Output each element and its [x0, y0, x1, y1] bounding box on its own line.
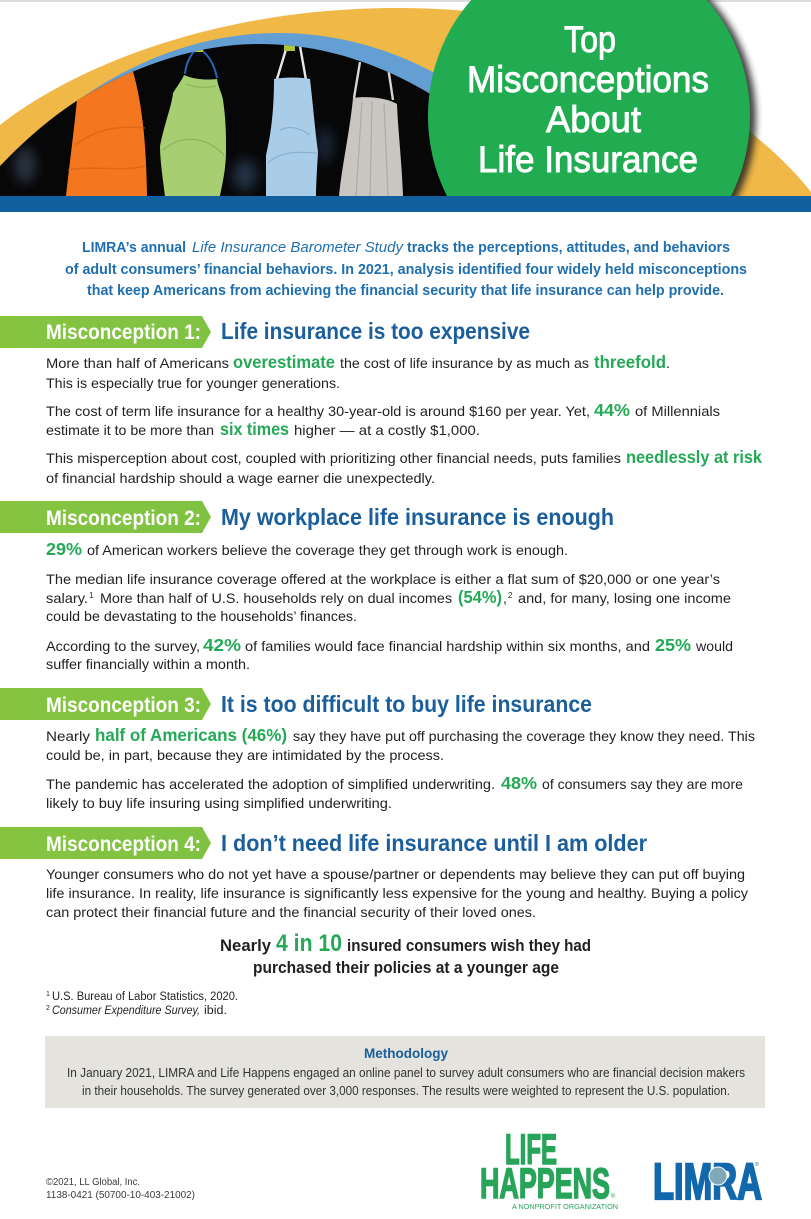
body 1: 44%	[594, 400, 630, 420]
methodology heading: Methodology	[364, 1045, 448, 1061]
body 1: estimate it to be more than	[46, 422, 214, 438]
green mask	[160, 48, 226, 196]
body 3: could be, in part, because they are intimidated by the process.	[46, 747, 444, 763]
body 4: can protect their financial future and the financial security of their loved ones.	[46, 904, 536, 920]
callout: Nearly	[220, 936, 272, 955]
body 1: of financial hardship should a wage earner die unexpectedly.	[46, 470, 435, 486]
intro text: Life Insurance Barometer Study	[192, 240, 404, 256]
body 2: According to the survey,	[46, 638, 200, 654]
body 2: of families would face financial hardship within six months, and	[245, 638, 650, 654]
body 1: The cost of term life insurance for a healthy 30-year-old is around $160 per year. Yet,	[46, 403, 590, 419]
body 2: of American workers believe the coverage they get through work is enough.	[87, 542, 568, 558]
heading 4: I don’t need life insurance until I am older	[221, 830, 647, 856]
panel: methodology	[45, 1036, 765, 1108]
title: Top	[564, 19, 616, 60]
banner 2: Misconception 2:	[46, 507, 201, 530]
body 2: suffer financially within a month.	[46, 656, 250, 672]
body 3: of consumers say they are more	[542, 776, 743, 792]
body 4	[46, 866, 748, 920]
body 2: salary.	[46, 590, 88, 606]
banner 3: Misconception 3:	[46, 694, 201, 717]
light blue mask	[266, 45, 318, 196]
body 3: 48%	[501, 773, 537, 793]
title	[467, 19, 709, 180]
body 3: half of Americans (46%)	[95, 725, 287, 745]
body 2	[46, 539, 733, 672]
body 2: would	[695, 638, 733, 654]
body 1: the cost of life insurance by as much as	[340, 355, 589, 371]
orange mask	[66, 68, 147, 196]
methodology text: in their households. The survey generated over 3,000 responses. The results were weighted to represent the U.S. population.	[82, 1084, 730, 1098]
logo: LIMRA	[653, 1153, 762, 1210]
body 1: overestimate	[233, 352, 335, 372]
heading 2: My workplace life insurance is enough	[221, 504, 614, 530]
body 2: 1	[89, 591, 94, 600]
callout	[220, 930, 591, 977]
blue band	[0, 196, 811, 212]
banner 1: Misconception 1:	[46, 321, 201, 344]
section: misconception 3	[0, 688, 755, 811]
body 1: This misperception about cost, coupled with prioritizing other financial needs, puts families	[46, 450, 621, 466]
footnotes: 2	[46, 1005, 50, 1012]
heading 3: It is too difficult to buy life insurance	[221, 691, 592, 717]
copyright: 1138-0421 (50700-10-403-21002)	[46, 1190, 195, 1201]
footnotes: Consumer Expenditure Survey,	[52, 1005, 200, 1017]
body 3: say they have put off purchasing the coverage they know they need. This	[293, 728, 755, 744]
body 2: 42%	[203, 635, 241, 655]
body 2: ,	[503, 590, 507, 606]
body 1: .	[666, 355, 670, 371]
body 2: More than half of U.S. households rely on dual incomes	[100, 590, 452, 606]
callout: 4 in 10	[276, 930, 342, 957]
title: About	[546, 99, 642, 140]
banner 2	[0, 501, 211, 533]
body 3: Nearly	[46, 728, 90, 744]
header illustration	[0, 0, 811, 212]
body 1: higher — at a costly $1,000.	[294, 422, 480, 438]
footnotes: U.S. Bureau of Labor Statistics, 2020.	[52, 991, 238, 1003]
logo: Life Happens	[480, 1126, 618, 1211]
intro text	[65, 240, 747, 299]
body 4: Younger consumers who do not yet have a spouse/partner or dependents may believe they can put off buying	[46, 866, 745, 882]
banner 4: Misconception 4:	[46, 833, 201, 856]
body 2: The median life insurance coverage offered at the workplace is either a flat sum of $20,000 or one year’s	[46, 571, 720, 587]
body 1: six times	[220, 419, 289, 439]
section: misconception 4	[0, 827, 748, 920]
section: misconception 1	[0, 316, 762, 486]
logo: Life Happens: ®	[611, 1193, 616, 1200]
body 2: and, for many, losing one income	[518, 590, 731, 606]
callout: insured consumers wish they had	[347, 936, 591, 955]
intro text: tracks the perceptions, attitudes, and behaviors	[407, 240, 730, 256]
section: misconception 2	[0, 501, 733, 672]
green circle shadow	[706, 0, 762, 196]
footnotes: 1	[46, 991, 50, 998]
grey mask	[339, 62, 403, 196]
body 2: 2	[508, 591, 513, 600]
callout: purchased their policies at a younger age	[253, 958, 559, 977]
intro text: that keep Americans from achieving the financial security that life insurance can help provide.	[87, 283, 724, 299]
body 3	[46, 725, 755, 811]
logo: LIMRA: LIMRA	[653, 1153, 762, 1210]
logo: LIMRA: ®	[755, 1161, 759, 1168]
body 1: This is especially true for younger generations.	[46, 375, 340, 391]
body 2: 25%	[655, 635, 691, 655]
body 2: (54%)	[458, 587, 502, 607]
body 2: 29%	[46, 539, 82, 559]
green circle	[428, 0, 750, 196]
footnotes: ibid.	[204, 1005, 227, 1017]
banner 1	[0, 316, 211, 348]
yellow arc	[0, 8, 811, 196]
logo: Life Happens: LIFE	[505, 1126, 557, 1174]
body 1: of Millennials	[635, 403, 720, 419]
heading 1: Life insurance is too expensive	[221, 318, 530, 344]
banner 4	[0, 827, 211, 859]
title: Life Insurance	[478, 139, 698, 180]
copyright	[46, 1177, 195, 1201]
body 1: More than half of Americans	[46, 355, 229, 371]
body 1	[46, 352, 762, 486]
methodology text: In January 2021, LIMRA and Life Happens engaged an online panel to survey adult consumers who are financial decision makers	[67, 1066, 745, 1080]
logo: Life Happens: A NONPROFIT ORGANIZATION	[512, 1202, 618, 1211]
logo: Life Happens: HAPPENS	[480, 1160, 610, 1208]
body 3: likely to buy life insuring using simplified underwriting.	[46, 795, 392, 811]
footnotes	[46, 991, 238, 1017]
methodology text	[67, 1066, 745, 1098]
copyright: ©2021, LL Global, Inc.	[46, 1177, 140, 1188]
body 1: needlessly at risk	[626, 447, 762, 467]
blue arc	[70, 33, 440, 120]
title: Misconceptions	[467, 59, 709, 100]
intro text: LIMRA’s annual	[82, 240, 186, 256]
mask photo	[0, 44, 447, 196]
body 1: threefold	[594, 352, 666, 372]
intro text: of adult consumers’ financial behaviors. In 2021, analysis identified four widely held misconceptions	[65, 262, 747, 278]
body 2: could be devastating to the households’ finances.	[46, 608, 357, 624]
body 3: The pandemic has accelerated the adoption of simplified underwriting.	[46, 776, 495, 792]
banner 3	[0, 688, 211, 720]
body 4: life insurance. In reality, life insurance is significantly less expensive for the young and healthy. Buying a policy	[46, 885, 748, 901]
